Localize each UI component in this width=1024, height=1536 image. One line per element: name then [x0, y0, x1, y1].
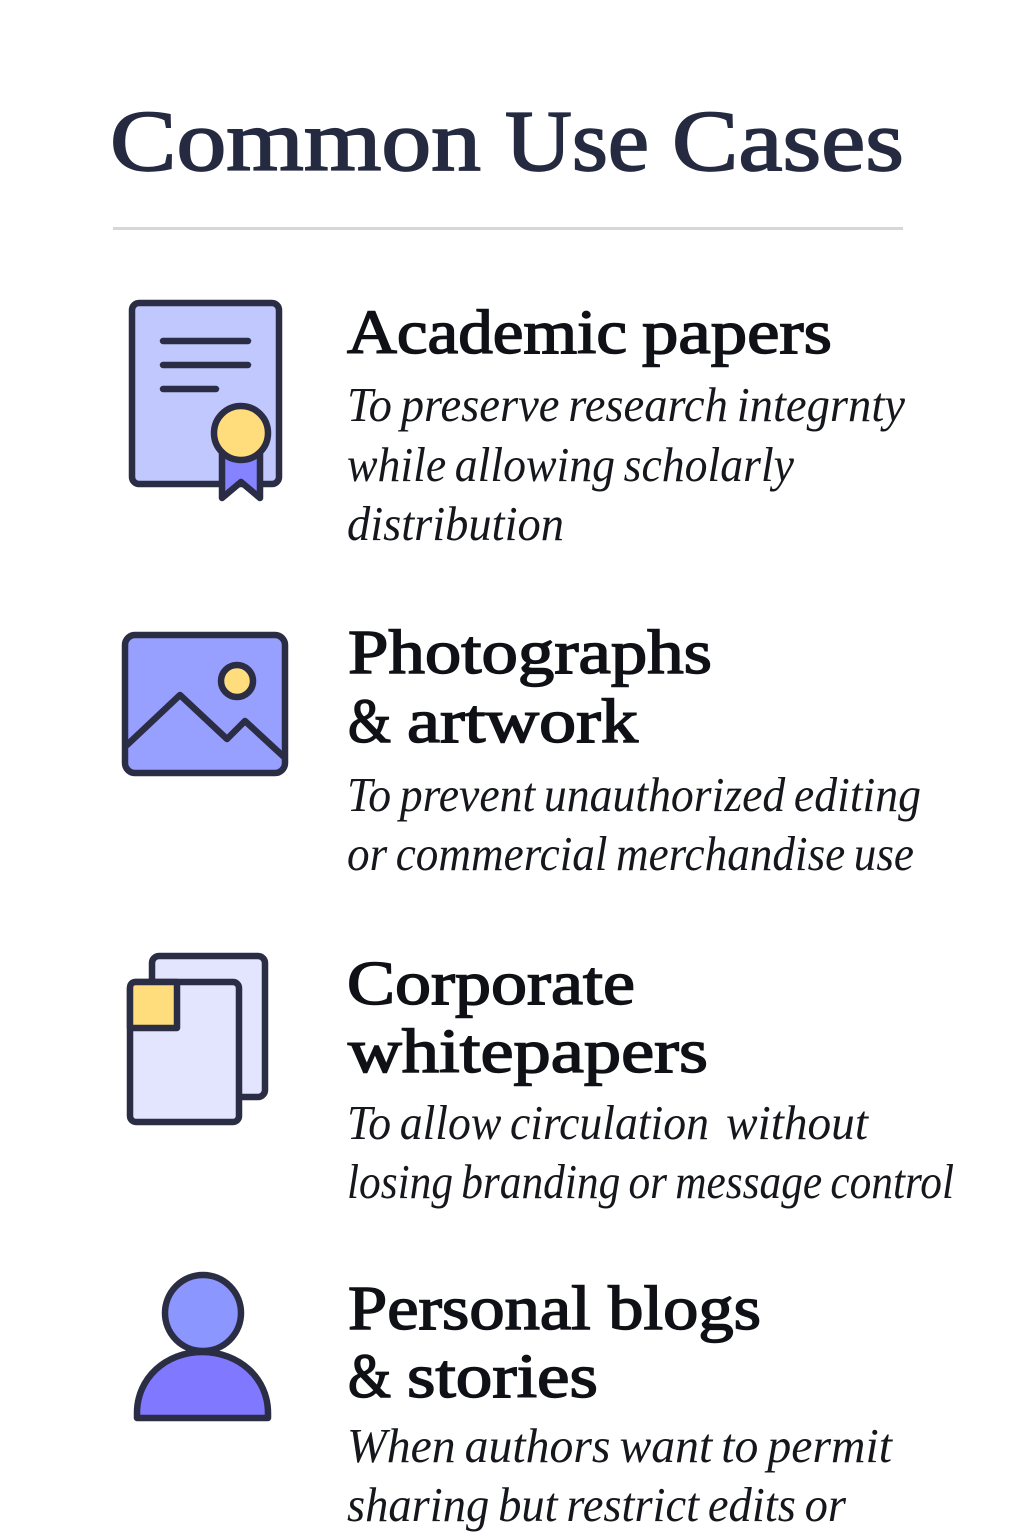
description: corporate whitepapers	[347, 1095, 954, 1209]
icon: documents	[130, 956, 265, 1122]
description: academic papers: distribution	[347, 496, 564, 551]
description: personal blogs and stories: sharing but restrict edits or	[347, 1477, 847, 1532]
description: personal blogs and stories: When authors want to permit	[347, 1418, 893, 1473]
icon: certificate	[132, 303, 279, 498]
description: corporate whitepapers: losing branding or message control	[347, 1154, 954, 1209]
panel: photographs and artwork	[125, 619, 921, 881]
heading: personal blogs and stories: Personal blogs	[348, 1275, 761, 1343]
panel: academic papers	[132, 299, 905, 551]
description: corporate whitepapers: without	[726, 1095, 869, 1150]
description: academic papers: To preserve research integrnty	[347, 377, 905, 432]
heading: academic papers	[347, 299, 832, 367]
heading: personal blogs and stories: &	[348, 1343, 391, 1411]
panel: personal blogs and stories	[137, 1275, 893, 1532]
heading: corporate whitepapers: whitepapers	[348, 1018, 708, 1086]
description: photographs and artwork	[347, 767, 921, 881]
title: Use	[505, 92, 649, 189]
panel: corporate whitepapers	[130, 950, 954, 1209]
title: Cases	[672, 92, 904, 189]
title	[110, 92, 904, 189]
description: photographs and artwork: To prevent unauthorized editing	[347, 767, 921, 822]
heading: corporate whitepapers: Corporate	[347, 950, 635, 1018]
title: Common	[110, 92, 481, 189]
description: personal blogs and stories	[347, 1418, 893, 1532]
heading: personal blogs and stories: stories	[407, 1343, 598, 1411]
heading: academic papers: Academic	[347, 299, 627, 367]
heading: academic papers: papers	[642, 299, 832, 367]
heading: personal blogs and stories	[348, 1275, 761, 1411]
heading: photographs and artwork: &	[348, 688, 391, 756]
description: corporate whitepapers: To allow circulation	[347, 1095, 709, 1150]
icon: picture	[125, 635, 285, 773]
icon: person	[137, 1275, 268, 1418]
heading: corporate whitepapers	[347, 950, 708, 1086]
description: academic papers: while allowing scholarly	[347, 437, 794, 492]
heading: photographs and artwork	[348, 619, 712, 756]
description: academic papers	[347, 377, 905, 551]
description: photographs and artwork: or commercial merchandise use	[347, 826, 914, 881]
heading: photographs and artwork: Photographs	[348, 619, 712, 687]
heading: photographs and artwork: artwork	[407, 688, 638, 756]
